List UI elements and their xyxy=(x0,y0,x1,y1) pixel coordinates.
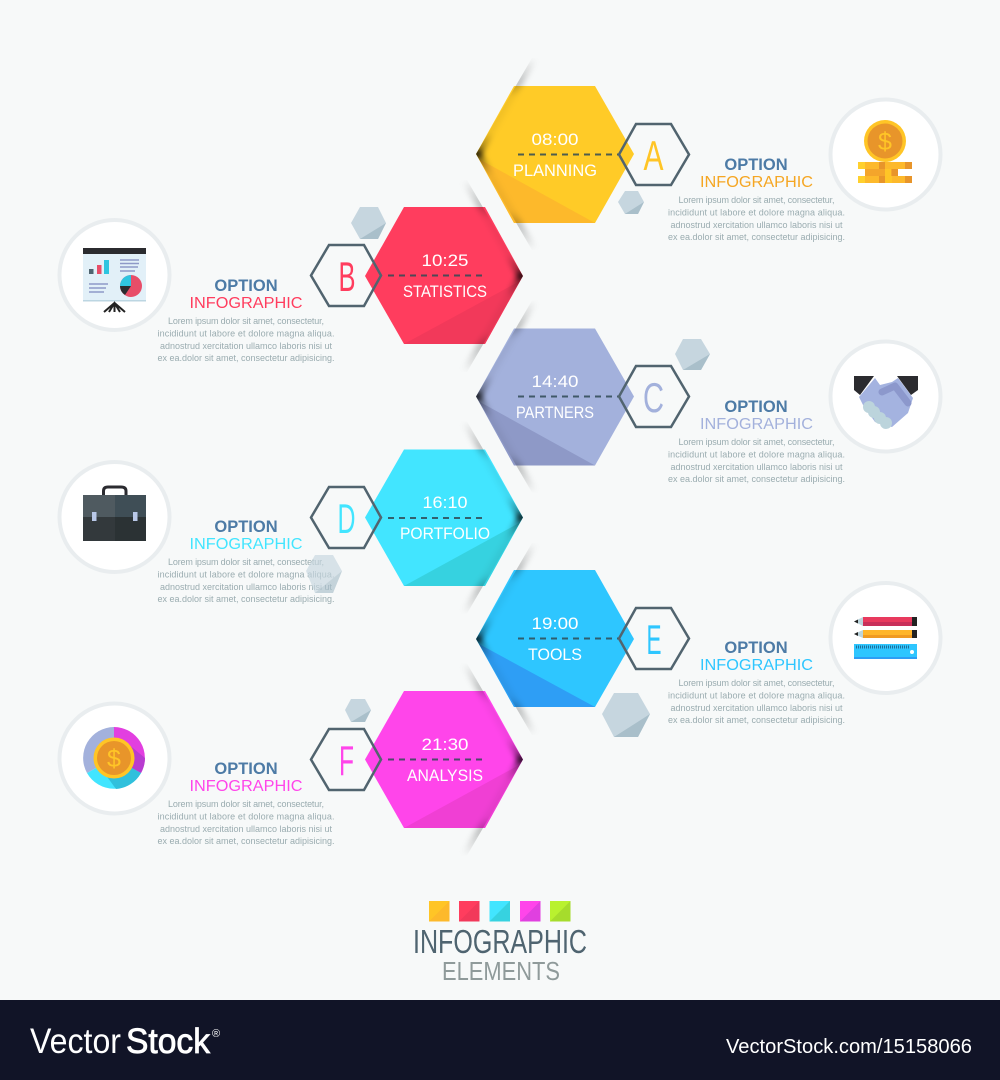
time and label F: ANALYSIS xyxy=(407,767,483,785)
text block E: INFOGRAPHIC xyxy=(700,657,813,674)
text block C: INFOGRAPHIC xyxy=(700,416,813,433)
text block C: OPTION xyxy=(724,398,788,416)
text block F: INFOGRAPHIC xyxy=(190,778,302,795)
footer image id: VectorStock.com/15158066 xyxy=(726,1036,972,1058)
text block D xyxy=(158,518,334,604)
bottom title xyxy=(413,923,587,986)
letter hexagon A xyxy=(619,124,689,185)
footer logo xyxy=(30,1022,220,1061)
text block A: OPTION xyxy=(724,156,788,174)
text block F: incididunt ut labore et dolore magna aliqua. xyxy=(158,812,334,822)
text block C: Lorem ipsum dolor sit amet, consectetur, xyxy=(678,437,834,447)
text block B: adnostrud xercitation ullamco laboris nisi ut xyxy=(160,341,332,351)
text block A: Lorem ipsum dolor sit amet, consectetur, xyxy=(678,195,834,205)
time and label F: 21:30 xyxy=(422,736,468,754)
text block D: INFOGRAPHIC xyxy=(190,536,302,553)
text block A: adnostrud xercitation ullamco laboris nisi ut xyxy=(670,220,843,230)
panel: step C partners xyxy=(476,300,940,492)
small hexagon D xyxy=(306,555,342,593)
text block D: OPTION xyxy=(214,518,278,536)
small hexagon F xyxy=(345,699,371,722)
time and label A xyxy=(513,131,620,180)
letter hexagon B: B xyxy=(338,253,356,300)
text block E: adnostrud xercitation ullamco laboris nisi ut xyxy=(670,703,843,713)
icon: presentation board xyxy=(60,220,170,330)
panel: step E tools xyxy=(476,543,940,737)
hexagon C xyxy=(476,300,634,492)
text block D: ex ea.dolor sit amet, consectetur adipisicing. xyxy=(158,594,334,604)
time and label D: PORTFOLIO xyxy=(400,525,490,543)
time and label B: 10:25 xyxy=(422,252,468,270)
icon: gold coin stack: $ xyxy=(878,128,892,156)
text block B: ex ea.dolor sit amet, consectetur adipisicing. xyxy=(158,353,334,363)
text block E: incididunt ut labore et dolore magna aliqua. xyxy=(668,690,845,700)
time and label E: 19:00 xyxy=(532,615,578,633)
letter hexagon D: D xyxy=(338,495,356,542)
text block E: Lorem ipsum dolor sit amet, consectetur, xyxy=(678,678,834,688)
time and label D: 16:10 xyxy=(422,494,468,512)
small hexagon E xyxy=(602,693,650,737)
time and label A: 08:00 xyxy=(532,131,578,149)
time and label B xyxy=(388,252,487,301)
letter hexagon F xyxy=(311,729,381,790)
letter hexagon E xyxy=(619,608,689,669)
text block C: ex ea.dolor sit amet, consectetur adipisicing. xyxy=(668,474,845,484)
time and label C: 14:40 xyxy=(532,373,578,391)
time and label B: STATISTICS xyxy=(403,283,487,301)
text block D: incididunt ut labore et dolore magna aliqua. xyxy=(158,570,334,580)
text block A: incididunt ut labore et dolore magna aliqua. xyxy=(668,208,845,218)
panel: step A planning xyxy=(476,58,940,250)
text block E: ex ea.dolor sit amet, consectetur adipisicing. xyxy=(668,715,845,725)
letter hexagon D xyxy=(311,487,381,548)
letter hexagon C: C xyxy=(643,374,664,421)
bottom title: ELEMENTS xyxy=(442,956,560,986)
bottom title: INFOGRAPHIC xyxy=(413,923,587,960)
icon: dollar coin on pie chart xyxy=(60,704,170,814)
hexagon A xyxy=(476,58,634,250)
small hexagon C xyxy=(675,339,710,370)
text block A xyxy=(668,156,845,242)
icon: briefcase xyxy=(60,462,170,572)
letter hexagon C xyxy=(619,366,689,427)
text block B xyxy=(158,277,334,363)
small hexagon B xyxy=(351,207,386,239)
letter hexagon E: E xyxy=(646,616,662,663)
hexagon B xyxy=(365,180,523,372)
hexagon E xyxy=(476,543,634,735)
text block A: INFOGRAPHIC xyxy=(700,174,813,191)
bottom color squares xyxy=(429,901,570,922)
text block B: incididunt ut labore et dolore magna aliqua. xyxy=(158,328,334,338)
panel: step B statistics xyxy=(60,180,523,372)
icon: pencils and ruler xyxy=(830,583,940,693)
time and label F xyxy=(388,736,484,785)
footer bar xyxy=(0,1000,1000,1080)
footer logo: Vector xyxy=(30,1022,121,1061)
text block A: ex ea.dolor sit amet, consectetur adipisicing. xyxy=(668,232,845,242)
time and label D xyxy=(388,494,490,543)
text block F: OPTION xyxy=(214,760,278,778)
icon: dollar coin on pie chart: $ xyxy=(107,745,121,773)
letter hexagon B xyxy=(311,245,381,306)
text block F: Lorem ipsum dolor sit amet, consectetur, xyxy=(168,799,324,809)
text block B: OPTION xyxy=(214,277,278,295)
time and label E xyxy=(518,615,620,664)
icon: handshake xyxy=(830,342,940,452)
hexagon F xyxy=(365,664,523,856)
time and label C: PARTNERS xyxy=(516,404,594,422)
footer logo: Stock xyxy=(126,1022,210,1061)
icon: gold coin stack xyxy=(830,100,940,210)
text block F: adnostrud xercitation ullamco laboris nisi ut xyxy=(160,824,332,834)
text block C: adnostrud xercitation ullamco laboris nisi ut xyxy=(670,462,843,472)
panel: step F analysis xyxy=(60,664,523,856)
letter hexagon A: A xyxy=(644,132,664,179)
text block B: Lorem ipsum dolor sit amet, consectetur, xyxy=(168,316,324,326)
text block E: OPTION xyxy=(724,639,788,657)
text block F: ex ea.dolor sit amet, consectetur adipisicing. xyxy=(158,836,334,846)
small hexagon A xyxy=(618,191,644,214)
time and label A: PLANNING xyxy=(513,162,597,180)
time and label E: TOOLS xyxy=(528,646,582,664)
text block F xyxy=(158,760,334,846)
text block C xyxy=(668,398,845,484)
text block B: INFOGRAPHIC xyxy=(190,295,302,312)
text block D: Lorem ipsum dolor sit amet, consectetur, xyxy=(168,557,324,567)
text block D: adnostrud xercitation ullamco laboris nisi ut xyxy=(160,582,332,592)
text block C: incididunt ut labore et dolore magna aliqua. xyxy=(668,450,845,460)
footer logo: ® xyxy=(212,1028,220,1040)
text block E xyxy=(668,639,845,725)
panel: step D portfolio xyxy=(60,422,523,614)
letter hexagon F: F xyxy=(339,737,354,784)
hexagon D xyxy=(365,422,523,614)
time and label C xyxy=(516,373,620,422)
